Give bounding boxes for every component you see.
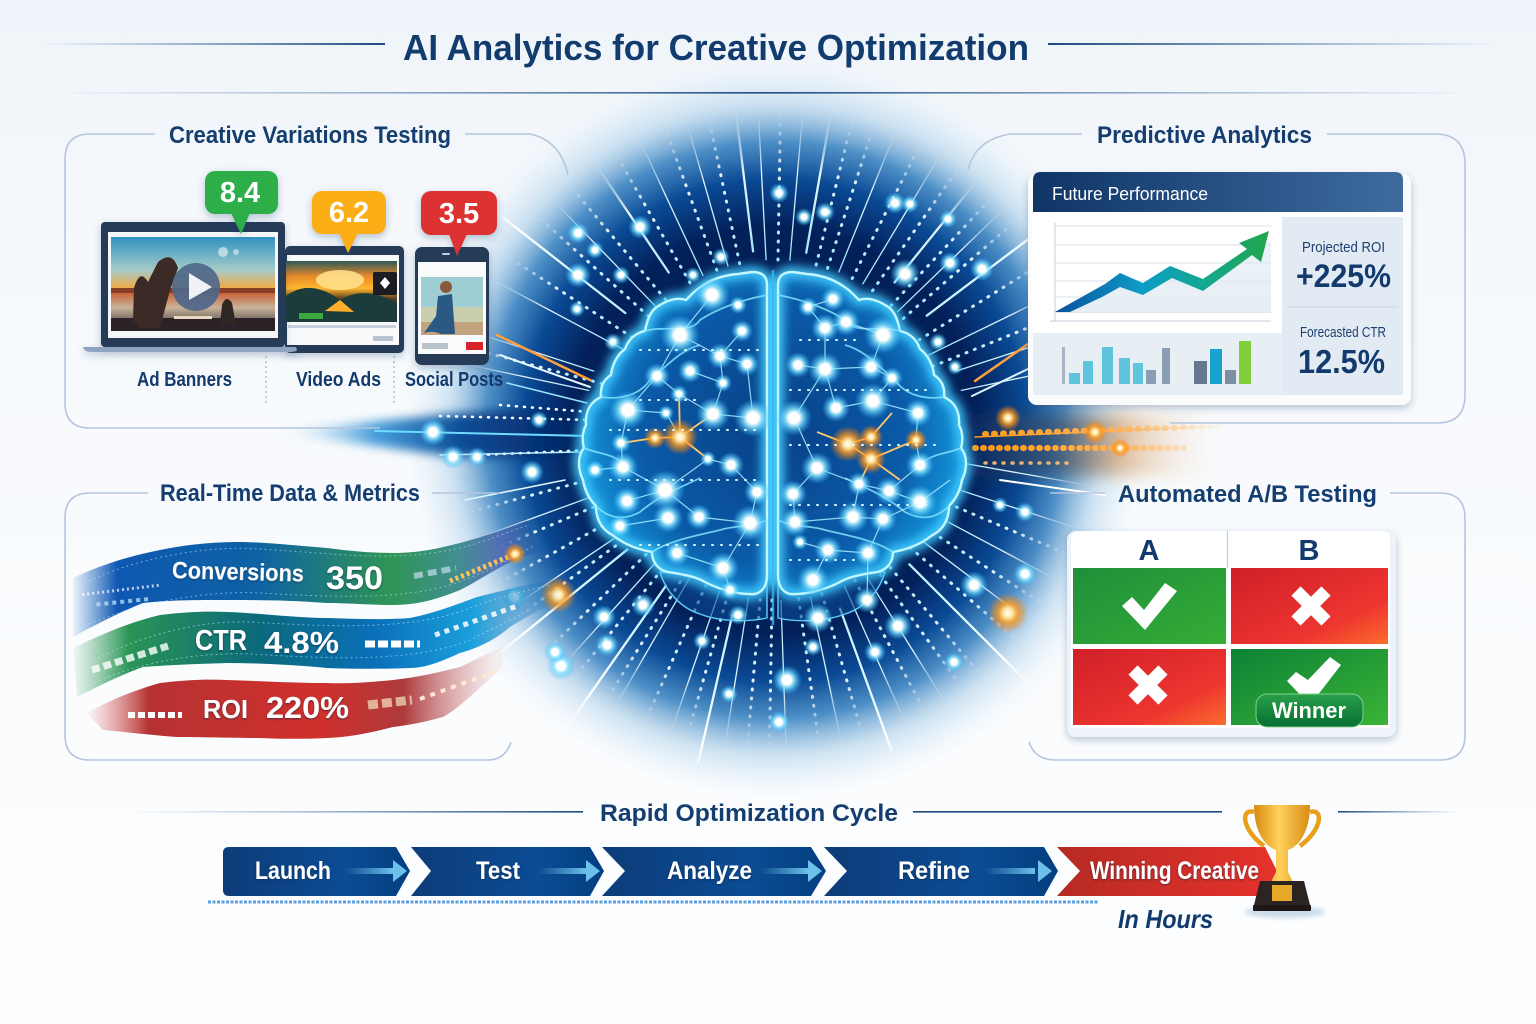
cell: A bottom fail: [1073, 649, 1226, 725]
glowing brain: [579, 270, 966, 633]
orange neural connections: [621, 394, 916, 484]
brain hemisphere outlines: [579, 272, 966, 594]
winner pill: Winner: [1272, 698, 1346, 723]
dotted data streams: [451, 110, 1083, 765]
ribbon: CTR: 4.8%: [264, 625, 339, 660]
score badge 3.5: [421, 191, 497, 256]
line chart with arrow: [1050, 223, 1271, 322]
dashboard card: [1028, 172, 1411, 405]
bright main rays: [480, 112, 1078, 761]
cell: B bottom pass: [1231, 649, 1388, 725]
label: ad banners: Ad Banners: [137, 369, 232, 391]
panel: real-time data and metrics: [65, 480, 565, 760]
heading: Automated A/B Testing: [1118, 481, 1377, 508]
stat: forecasted CTR: 12.5%: [1298, 343, 1385, 380]
ribbon: ROI: 220%: [266, 690, 349, 725]
stat: projected ROI: +225%: [1296, 258, 1391, 294]
panel: predictive analytics: [968, 122, 1465, 423]
rapid optimization cycle: [130, 800, 1458, 934]
card header: [1033, 172, 1403, 212]
ribbon: ROI: [87, 647, 503, 739]
heading: Predictive Analytics: [1097, 122, 1312, 149]
neural connections: [595, 295, 950, 600]
column B label: B: [1299, 535, 1319, 567]
card header: Future Performance: [1052, 184, 1208, 204]
stat: projected ROI: Projected ROI: [1302, 240, 1385, 256]
left warm rays: [497, 335, 590, 403]
heading: Creative Variations Testing: [169, 122, 451, 149]
device: laptop with ad banner: [83, 222, 297, 352]
brain hemisphere fill: [579, 272, 966, 594]
ribbon: conversions: [73, 520, 540, 637]
step: test: [411, 847, 604, 896]
cell: A top pass: [1073, 568, 1226, 644]
mini bar charts: [1062, 341, 1251, 384]
step: launch: Launch: [255, 857, 331, 885]
neural nodes: [585, 277, 937, 633]
stat: projected ROI: [1296, 240, 1391, 294]
device: phone with social post: [415, 247, 489, 365]
brain midline: [772, 270, 774, 625]
header divider: [50, 92, 765, 94]
panel frame: [65, 493, 511, 760]
score badge 6.2: 6.2: [329, 197, 369, 229]
stat: forecasted CTR: [1298, 325, 1386, 380]
ribbon spark: [504, 543, 526, 565]
icon: play button: [172, 263, 220, 311]
ribbon: CTR: CTR: [195, 625, 247, 657]
A/B grid card: [1067, 531, 1396, 737]
score badge 3.5: 3.5: [439, 198, 479, 230]
score badge 8.4: [205, 171, 278, 234]
cell: B top fail: [1231, 568, 1388, 644]
column A label: A: [1139, 535, 1160, 567]
brain lower faint lobes: [660, 572, 885, 621]
label: video ads: Video Ads: [296, 369, 381, 391]
brain hemisphere glow: [579, 272, 966, 594]
stat: forecasted CTR: Forecasted CTR: [1300, 325, 1386, 341]
orange energy points: [540, 405, 1130, 633]
title: AI Analytics for Creative Optimization: [403, 27, 1029, 68]
radiating light rays: [403, 110, 1149, 765]
icon: trophy: [1245, 805, 1325, 918]
label: social posts: Social Posts: [405, 369, 503, 391]
central neural burst background: [270, 60, 1230, 800]
device: tablet with video ad: [285, 246, 404, 353]
step: refine: [824, 847, 1058, 896]
sparkle particles around the brain: [419, 183, 1037, 733]
brain interior data specks: [610, 340, 940, 560]
winner pill: [1256, 694, 1363, 727]
panel frame: [1029, 493, 1465, 760]
step: analyze: [602, 847, 826, 896]
right orange beaded streaks: [972, 344, 1225, 495]
ribbon: ROI: ROI: [203, 694, 248, 724]
score badge 8.4: 8.4: [220, 177, 260, 209]
step: winning creative: Winning Creative: [1090, 857, 1259, 885]
ribbon: CTR: [73, 577, 565, 697]
panel: creative variations testing: [65, 122, 568, 428]
dotted timeline: [208, 900, 1098, 904]
step: test: Test: [476, 857, 521, 885]
step: refine: Refine: [898, 857, 970, 885]
panel frame: [968, 134, 1465, 423]
step: launch: [223, 847, 410, 896]
ribbon: conversions: 350: [326, 560, 383, 596]
step: winning creative: [1057, 847, 1277, 896]
side light streaks: [375, 335, 1225, 500]
panel frame: [65, 134, 568, 428]
score badge 6.2: [312, 191, 386, 253]
heading: Rapid Optimization Cycle: [600, 800, 898, 827]
panel: automated A/B testing: [1029, 481, 1465, 760]
orange neural nodes: [644, 419, 927, 474]
left blue streaks: [375, 405, 590, 500]
step: analyze: Analyze: [667, 857, 752, 885]
in hours label: In Hours: [1118, 904, 1213, 934]
brain fold lines: [584, 295, 961, 552]
label dividers: [266, 356, 394, 405]
ribbon: conversions: Conversions: [172, 557, 304, 588]
heading: Real-Time Data & Metrics: [160, 480, 420, 507]
